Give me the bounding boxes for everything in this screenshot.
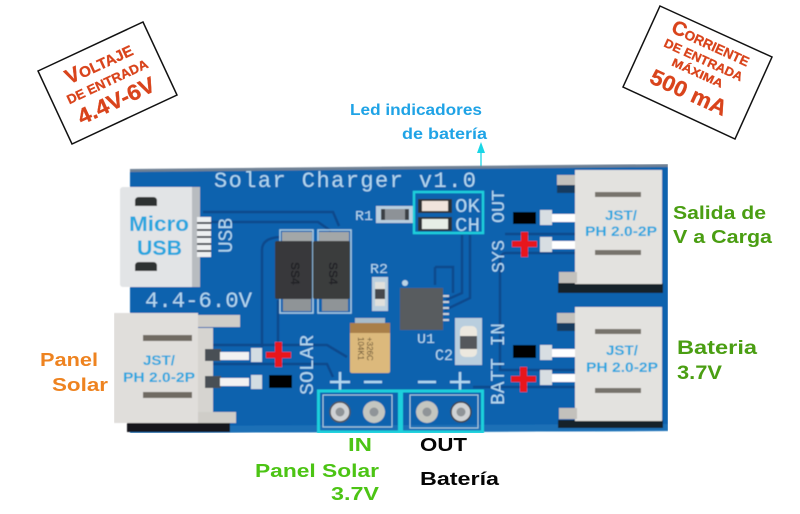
silkscreen labels: BATT IN (488, 323, 510, 405)
JST connector: battery: JST/ (606, 342, 638, 358)
silkscreen labels: C2 (435, 347, 453, 365)
label: Panel Solar left (40, 350, 108, 395)
current note card: 500 mA (646, 64, 731, 121)
controller chip (400, 280, 449, 330)
polarity marks (266, 212, 537, 392)
label: Bateria 3.7V: Bateria (677, 338, 758, 359)
current note card: DE ENTRADA (662, 36, 745, 84)
tantalum capacitor (350, 318, 390, 373)
input pads (318, 391, 400, 432)
tantalum capacitor: +326C (365, 337, 374, 361)
LED heading: de batería (402, 126, 487, 143)
silkscreen labels: R2 (370, 262, 388, 278)
label: Panel Solar left: Panel (40, 350, 98, 370)
voltage note card: 4.4V-6V (73, 72, 159, 130)
JST connector: system output (540, 170, 663, 293)
voltage note card: VOLTAJE (61, 38, 136, 89)
resistor R1 (376, 206, 413, 223)
micro USB connector (120, 187, 211, 287)
output pads (402, 391, 482, 432)
resistor R2 (372, 277, 388, 311)
label: Salida de V a Carga: Salida de (673, 203, 766, 223)
label: IN Panel Solar 3.7V: IN (348, 435, 372, 455)
JST connector: battery: PH 2.0-2P (586, 359, 658, 375)
label: IN Panel Solar 3.7V: Panel Solar (255, 461, 379, 481)
micro USB connector: Micro (129, 213, 189, 236)
silkscreen labels: OUT (490, 190, 510, 223)
LED indicators (414, 192, 483, 233)
circuit board (114, 164, 668, 433)
silkscreen labels (145, 190, 510, 405)
label: OUT Batería: OUT (420, 435, 467, 455)
board title: Solar Charger v1.0 (214, 169, 476, 194)
silkscreen labels: R1 (355, 209, 373, 225)
JST connector: solar (114, 313, 262, 432)
LED heading: Led indicadores (350, 102, 482, 119)
label: IN Panel Solar 3.7V: 3.7V (331, 484, 379, 504)
diodes (275, 230, 351, 313)
LED heading (350, 102, 487, 143)
silkscreen labels: CH (455, 215, 480, 237)
silkscreen labels: USB (216, 218, 239, 253)
label: Panel Solar left: Solar (52, 375, 108, 395)
label: IN Panel Solar 3.7V (255, 435, 379, 504)
label: Salida de V a Carga (673, 203, 773, 247)
JST connector: solar: PH 2.0-2P (123, 369, 195, 385)
JST connector: solar: JST/ (143, 352, 175, 368)
current note card: MÁXIMA (670, 56, 725, 91)
voltage note card (38, 22, 177, 144)
diodes: SS4 (288, 262, 302, 285)
current note card (623, 6, 772, 139)
arrow: LED pointer (477, 142, 485, 192)
JST connector: system output: JST/ (605, 207, 637, 223)
silkscreen labels: SOLAR (297, 335, 319, 395)
micro USB connector: USB (137, 237, 182, 260)
label: OUT Batería: Batería (420, 469, 500, 489)
label: OUT Batería (420, 435, 500, 489)
silkscreen labels: U1 (417, 332, 435, 348)
silkscreen labels: OK (455, 196, 481, 218)
current note card: CORRIENTE (668, 16, 754, 71)
label: Salida de V a Carga: V a Carga (673, 227, 773, 247)
voltage note card: DE ENTRADA (64, 56, 151, 107)
JST connector: system output: PH 2.0-2P (585, 223, 657, 239)
tantalum capacitor: 104K1 (356, 337, 365, 361)
silkscreen labels: SYS (490, 240, 510, 273)
capacitor C2 (455, 318, 482, 365)
silkscreen labels: 4.4-6.0V (145, 289, 253, 314)
copper traces (203, 212, 575, 387)
JST connector: battery (540, 307, 663, 428)
label: Bateria 3.7V: 3.7V (677, 363, 722, 384)
diodes: SS4 (326, 262, 340, 285)
label: Bateria 3.7V (677, 338, 758, 384)
